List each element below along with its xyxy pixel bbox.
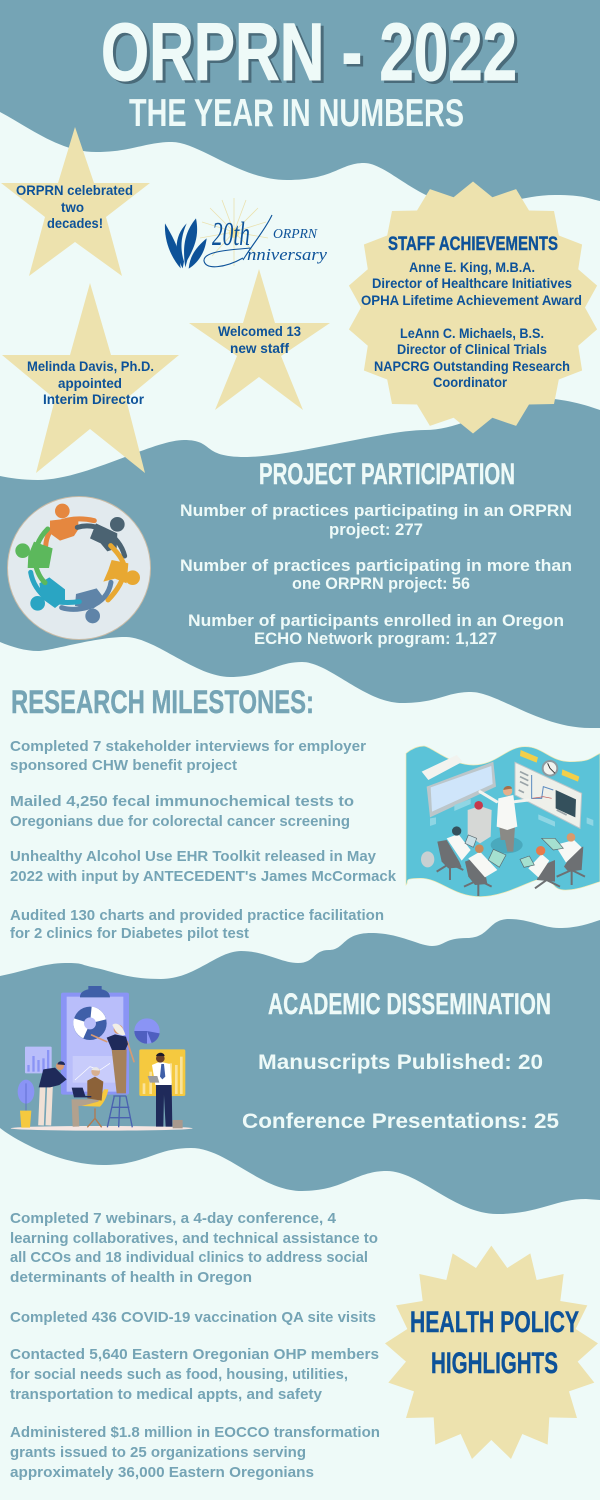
text block: health policy highlights: Administered $1.8 million in EOCCO transformation <box>10 1425 380 1441</box>
text block: research milestones: 2022 with input by ANTECEDENT's James McCormack <box>10 869 397 885</box>
star: new staff <box>189 269 330 410</box>
text block: academic dissemination figures: Manuscripts Published: 20 <box>258 1050 543 1074</box>
text block: research milestones: for 2 clinics for Diabetes pilot test <box>10 926 249 942</box>
text block: health policy highlights: learning collaboratives, and technical assistance to <box>10 1231 378 1247</box>
20th anniversary logo <box>165 198 327 269</box>
text block: health policy highlights: approximately 36,000 Eastern Oregonians <box>10 1465 314 1481</box>
text block: health policy highlights: grants issued to 25 organizations serving <box>10 1445 306 1461</box>
20th anniversary logo: 20th <box>212 216 250 253</box>
text block: project participation figures: Number of practices participating in more than <box>180 557 572 575</box>
text block: research milestones: Audited 130 charts and provided practice facilitation <box>10 908 384 924</box>
text block: academic dissemination figures <box>242 1050 559 1133</box>
star: interim director: appointed <box>58 376 122 391</box>
panel: staff achievements: Director of Clinical Trials <box>397 342 547 357</box>
heading: research milestones: RESEARCH MILESTONES: <box>11 684 314 720</box>
badge: health policy highlights <box>385 1246 598 1459</box>
star: new staff: Welcomed 13 <box>218 324 301 339</box>
text block: research milestones: Unhealthy Alcohol Use EHR Toolkit released in May <box>10 849 377 865</box>
panel: staff achievements: NAPCRG Outstanding Research <box>374 359 570 374</box>
text block: research milestones: Completed 7 stakeholder interviews for employer <box>10 739 366 755</box>
panel: staff achievements: OPHA Lifetime Achievement Award <box>361 293 582 308</box>
text block: health policy highlights: determinants of health in Oregon <box>10 1270 252 1286</box>
text block: project participation figures: one ORPRN project: 56 <box>292 575 470 593</box>
panel: staff achievements: Anne E. King, M.B.A. <box>409 260 535 275</box>
panel: staff achievements: Director of Healthcare Initiatives <box>372 276 572 291</box>
subtitle: THE YEAR IN NUMBERS <box>129 92 464 135</box>
panel: staff achievements: Coordinator <box>433 375 508 390</box>
star: two decades: decades! <box>47 216 103 231</box>
icon: circle of people <box>8 496 150 640</box>
text block: health policy highlights: Completed 436 COVID-19 vaccination QA site visits <box>10 1310 376 1326</box>
text block: research milestones: Mailed 4,250 fecal immunochemical tests to <box>10 794 354 810</box>
panel: staff achievements: LeAnn C. Michaels, B.S. <box>400 326 544 341</box>
star: two decades <box>1 127 150 276</box>
text block: health policy highlights: all CCOs and 18 individual clinics to address social <box>10 1250 368 1266</box>
text block: health policy highlights: for social needs such as food, housing, utilities, <box>10 1367 348 1383</box>
text block: project participation figures: ECHO Network program: 1,127 <box>254 630 497 648</box>
text block: academic dissemination figures: Conference Presentations: 25 <box>242 1109 559 1133</box>
text block: project participation figures: Number of practices participating in an ORPRN <box>180 502 572 520</box>
text block: health policy highlights: transportation to medical appts, and safety <box>10 1387 323 1403</box>
text block: research milestones <box>10 739 397 942</box>
panel: staff achievements <box>349 182 597 434</box>
text block: research milestones: Oregonians due for colorectal cancer screening <box>10 814 350 830</box>
star: two decades: two <box>61 200 84 215</box>
20th anniversary logo: ORPRN <box>273 226 318 241</box>
star: interim director: Melinda Davis, Ph.D. <box>27 359 154 374</box>
star: interim director <box>2 283 179 473</box>
text block: health policy highlights <box>10 1211 380 1481</box>
text block: health policy highlights: Contacted 5,640 Eastern Oregonian OHP members <box>10 1347 379 1363</box>
text block: project participation figures: Number of participants enrolled in an Oregon <box>188 612 564 630</box>
text block: research milestones: sponsored CHW benefit project <box>10 758 237 774</box>
star: two decades: ORPRN celebrated <box>16 183 133 198</box>
illustration: research meeting <box>406 746 600 897</box>
text block: project participation figures: project: 277 <box>329 521 423 539</box>
text block: health policy highlights: Completed 7 webinars, a 4-day conference, 4 <box>10 1211 337 1227</box>
star: interim director: Interim Director <box>43 392 145 407</box>
illustration: team with charts <box>11 986 193 1131</box>
star: new staff: new staff <box>230 341 289 356</box>
text block: project participation figures <box>180 502 572 648</box>
20th anniversary logo: nniversary <box>247 245 327 264</box>
